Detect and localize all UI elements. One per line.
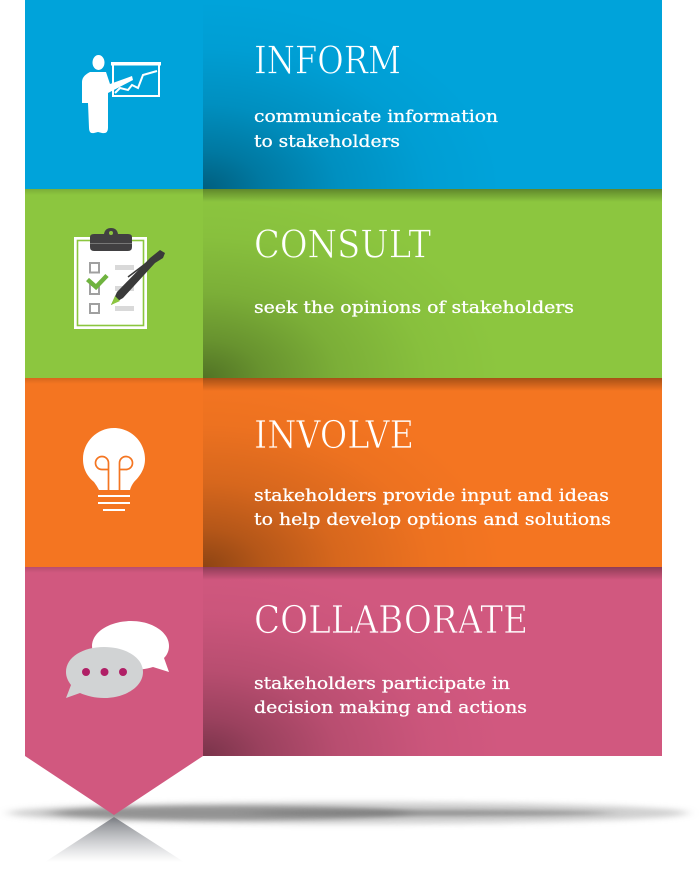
panel: collaborate (25, 567, 662, 815)
icon: presenter at chart (82, 55, 161, 133)
icon: clipboard and pen (74, 228, 165, 329)
involve description: stakeholders provide input and ideas (254, 486, 609, 506)
panel: consult (25, 189, 662, 378)
inform description: communicate information (254, 107, 498, 127)
involve fold shadow (203, 378, 503, 567)
collaborate top shadow (203, 567, 662, 580)
consult description: seek the opinions of stakeholders (254, 298, 574, 318)
inform description (254, 107, 498, 152)
collaborate description (254, 674, 527, 718)
inform description: to stakeholders (254, 132, 400, 152)
involve heading: INVOLVE (254, 413, 414, 457)
arrow reflection (45, 817, 184, 862)
consult heading: CONSULT (254, 222, 431, 266)
icon: light bulb (83, 428, 145, 511)
collaborate description: decision making and actions (254, 698, 527, 718)
involve description (254, 486, 611, 530)
involve top shadow (203, 378, 662, 391)
consult left column top shading (25, 189, 203, 195)
inform fold shadow (203, 0, 503, 189)
icon: speech bubbles (66, 621, 169, 698)
panel: inform (25, 0, 662, 189)
collaborate fold shadow (203, 567, 503, 756)
panel: involve (25, 378, 662, 567)
floor shadow (8, 802, 688, 824)
involve left column top shading (25, 378, 203, 384)
consult top shadow (203, 189, 662, 202)
collaborate left column top shading (25, 567, 203, 573)
collaborate description: stakeholders participate in (254, 674, 510, 694)
collaborate heading: COLLABORATE (254, 598, 528, 642)
consult fold shadow (203, 189, 503, 378)
involve description: to help develop options and solutions (254, 510, 611, 530)
inform heading: INFORM (254, 38, 401, 82)
